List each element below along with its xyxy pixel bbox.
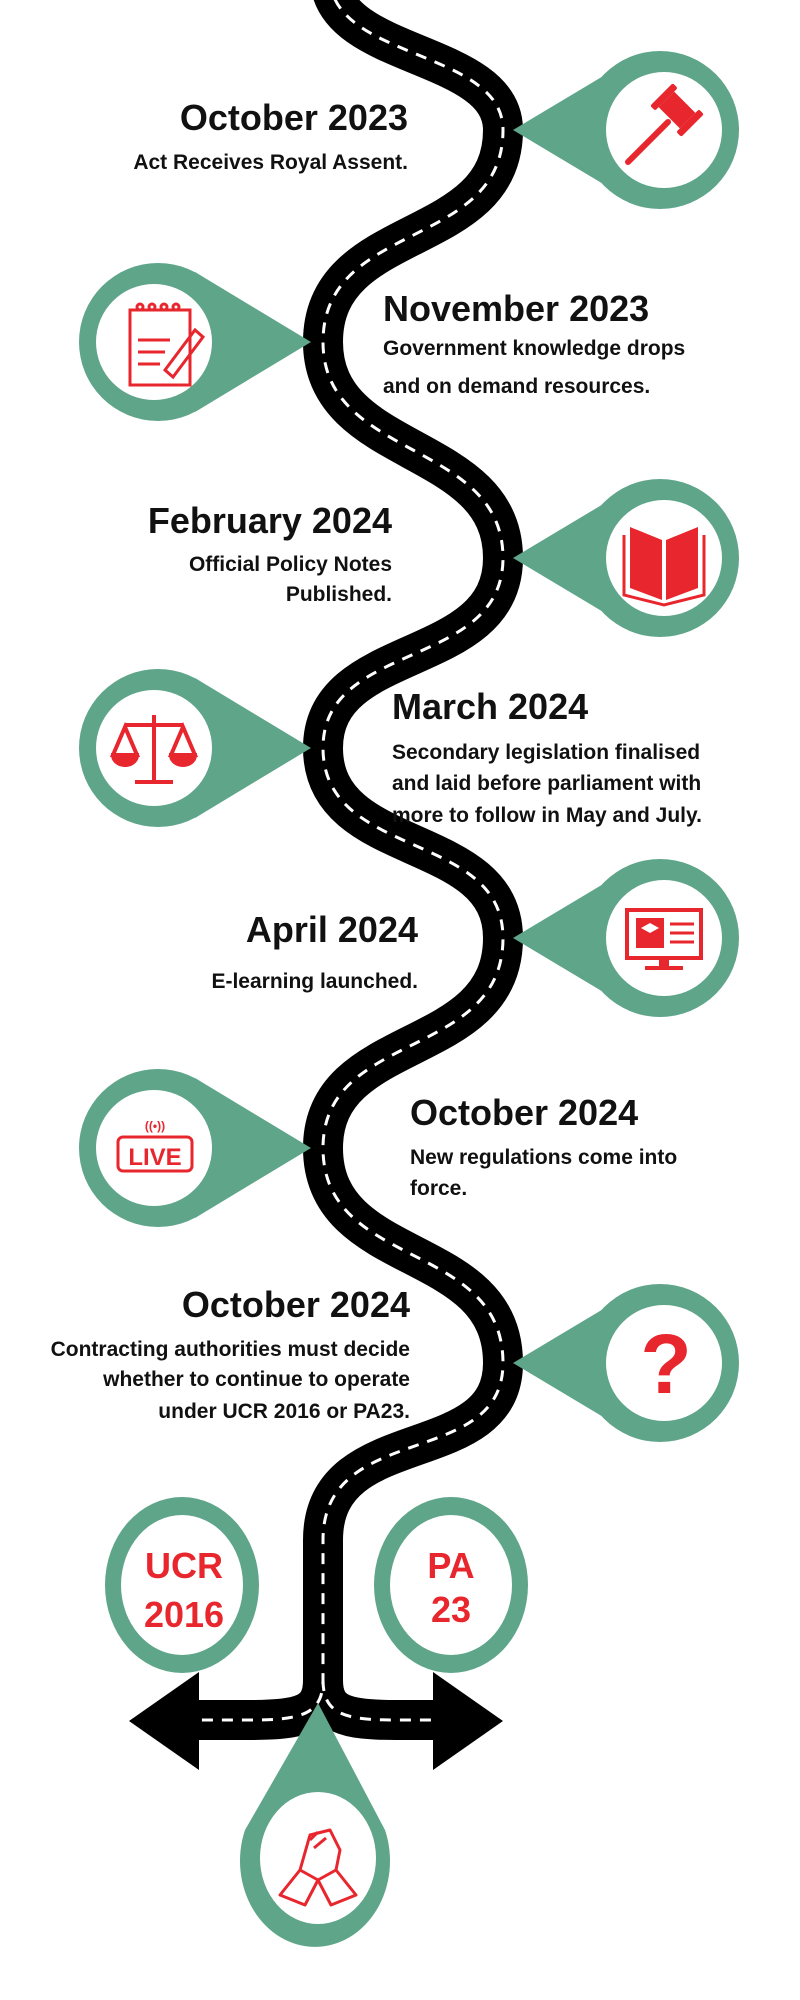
text: March 2024: Secondary legislation finalised	[392, 741, 700, 764]
icon: notepad	[130, 304, 203, 385]
circle: PA 23	[374, 1497, 528, 1673]
text: October 2024 new regulations: force.	[410, 1177, 467, 1200]
pin: November 2023 notepad	[79, 263, 311, 421]
icon: gavel	[628, 83, 704, 162]
text: October 2024 decision: Contracting authorities must decide	[51, 1338, 410, 1361]
text: October 2023	[133, 97, 408, 174]
text: April 2024	[211, 909, 418, 993]
text: February 2024: Published.	[286, 583, 392, 606]
pin: October 2023 gavel	[513, 51, 739, 209]
pin: March 2024 scales	[79, 669, 311, 827]
text: November 2023	[383, 288, 685, 398]
icon: book	[624, 527, 704, 605]
text: February 2024	[148, 500, 392, 606]
text: October 2024 new regulations	[410, 1092, 677, 1200]
text: March 2024: and laid before parliament with	[392, 772, 701, 795]
icon: handshake	[280, 1830, 356, 1905]
text: October 2023: October 2023	[180, 97, 408, 138]
text: October 2024 decision: whether to continue to operate	[102, 1368, 410, 1391]
text: April 2024: April 2024	[246, 909, 418, 950]
road	[190, 0, 503, 1720]
text: November 2023: Government knowledge drops	[383, 337, 685, 360]
icon: LIVE: ((•))	[145, 1119, 165, 1133]
icon: LIVE: LIVE	[128, 1144, 182, 1171]
pin: February 2024 book	[513, 479, 739, 637]
icon: monitor	[627, 910, 701, 970]
pin: April 2024 monitor	[513, 859, 739, 1017]
text: March 2024	[392, 686, 702, 827]
text: November 2023: November 2023	[383, 288, 649, 329]
arrow: right branch	[433, 1672, 503, 1770]
text: March 2024: more to follow in May and July.	[392, 804, 702, 827]
text: October 2023: Act Receives Royal Assent.	[133, 151, 408, 174]
text: February 2024: Official Policy Notes	[189, 553, 392, 576]
text: November 2023: and on demand resources.	[383, 375, 650, 398]
arrow: left branch	[129, 1672, 199, 1770]
pin: October 2024 question	[513, 1284, 739, 1442]
pin: handshake bottom	[240, 1703, 390, 1947]
text: October 2024 decision	[51, 1284, 410, 1423]
text: October 2024 new regulations: October 2024	[410, 1092, 638, 1133]
text: October 2024 decision: October 2024	[182, 1284, 410, 1325]
circle: UCR 2016: 2016	[144, 1594, 224, 1635]
text: April 2024: E-learning launched.	[211, 970, 418, 993]
circle: UCR 2016	[105, 1497, 259, 1673]
icon: question mark: ?	[640, 1317, 692, 1411]
circle: UCR 2016: UCR	[145, 1545, 223, 1586]
text: March 2024: March 2024	[392, 686, 588, 727]
circle: PA 23: 23	[431, 1589, 471, 1630]
text: February 2024: February 2024	[148, 500, 392, 541]
pin: October 2024 LIVE	[79, 1069, 311, 1227]
icon: scales	[113, 715, 195, 782]
icon: LIVE	[118, 1119, 192, 1171]
circle: PA 23: PA	[427, 1545, 475, 1586]
text: October 2024 decision: under UCR 2016 or PA23.	[158, 1400, 410, 1423]
text: October 2024 new regulations: New regulations come into	[410, 1146, 677, 1169]
